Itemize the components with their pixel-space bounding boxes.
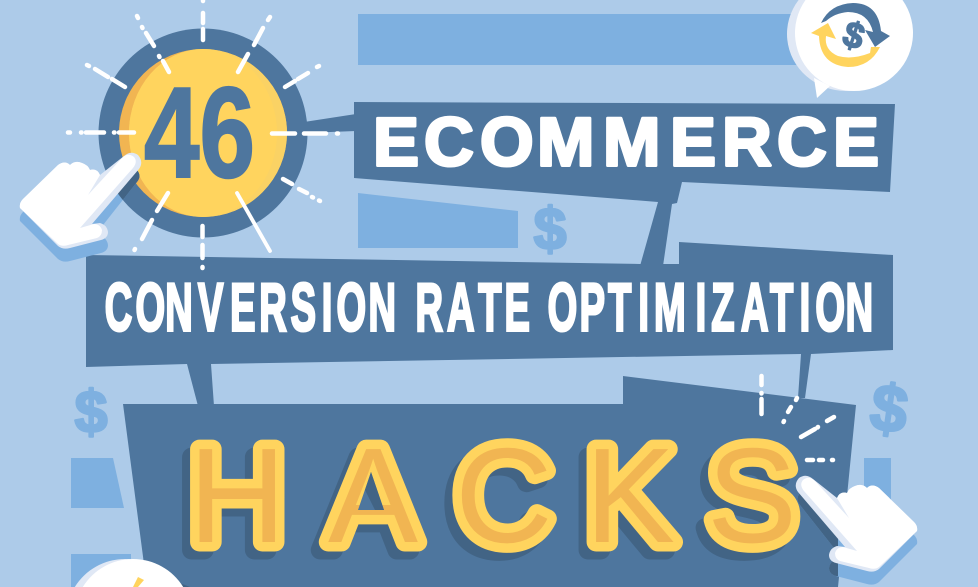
heading: ecommerce: ECOMMERCE (373, 104, 879, 180)
icon: yellow arrow (811, 23, 880, 67)
dollar signs: $ (75, 379, 107, 445)
icon: dollar: $ (838, 13, 870, 58)
heading: conversion rate optimization: CONVERSION RATE OPTIMIZATION (105, 269, 873, 345)
dollar signs: $ (534, 196, 566, 262)
icon: right pointing hand (796, 476, 917, 585)
speech bubble bottom left (75, 559, 190, 587)
connector from circle (304, 114, 356, 133)
number 46: 46 (144, 61, 255, 205)
icon: blue arrow (821, 3, 890, 47)
panel: hacks (123, 376, 856, 587)
heading: hacks: HACKS (188, 420, 797, 571)
heading: hacks: HACKS (188, 420, 797, 571)
icon: left pointing hand (20, 153, 141, 262)
rays by right hand (762, 376, 834, 460)
heading: hacks: HACKS (180, 428, 789, 579)
banner: ecommerce (304, 102, 895, 266)
speech bubble with money cycle icon (787, 0, 913, 98)
banner: conversion rate optimization (86, 242, 893, 406)
badge: 46 (98, 28, 308, 238)
dollar signs (75, 196, 913, 447)
rays around badge (68, 0, 338, 268)
dollar signs: $ (866, 369, 913, 447)
